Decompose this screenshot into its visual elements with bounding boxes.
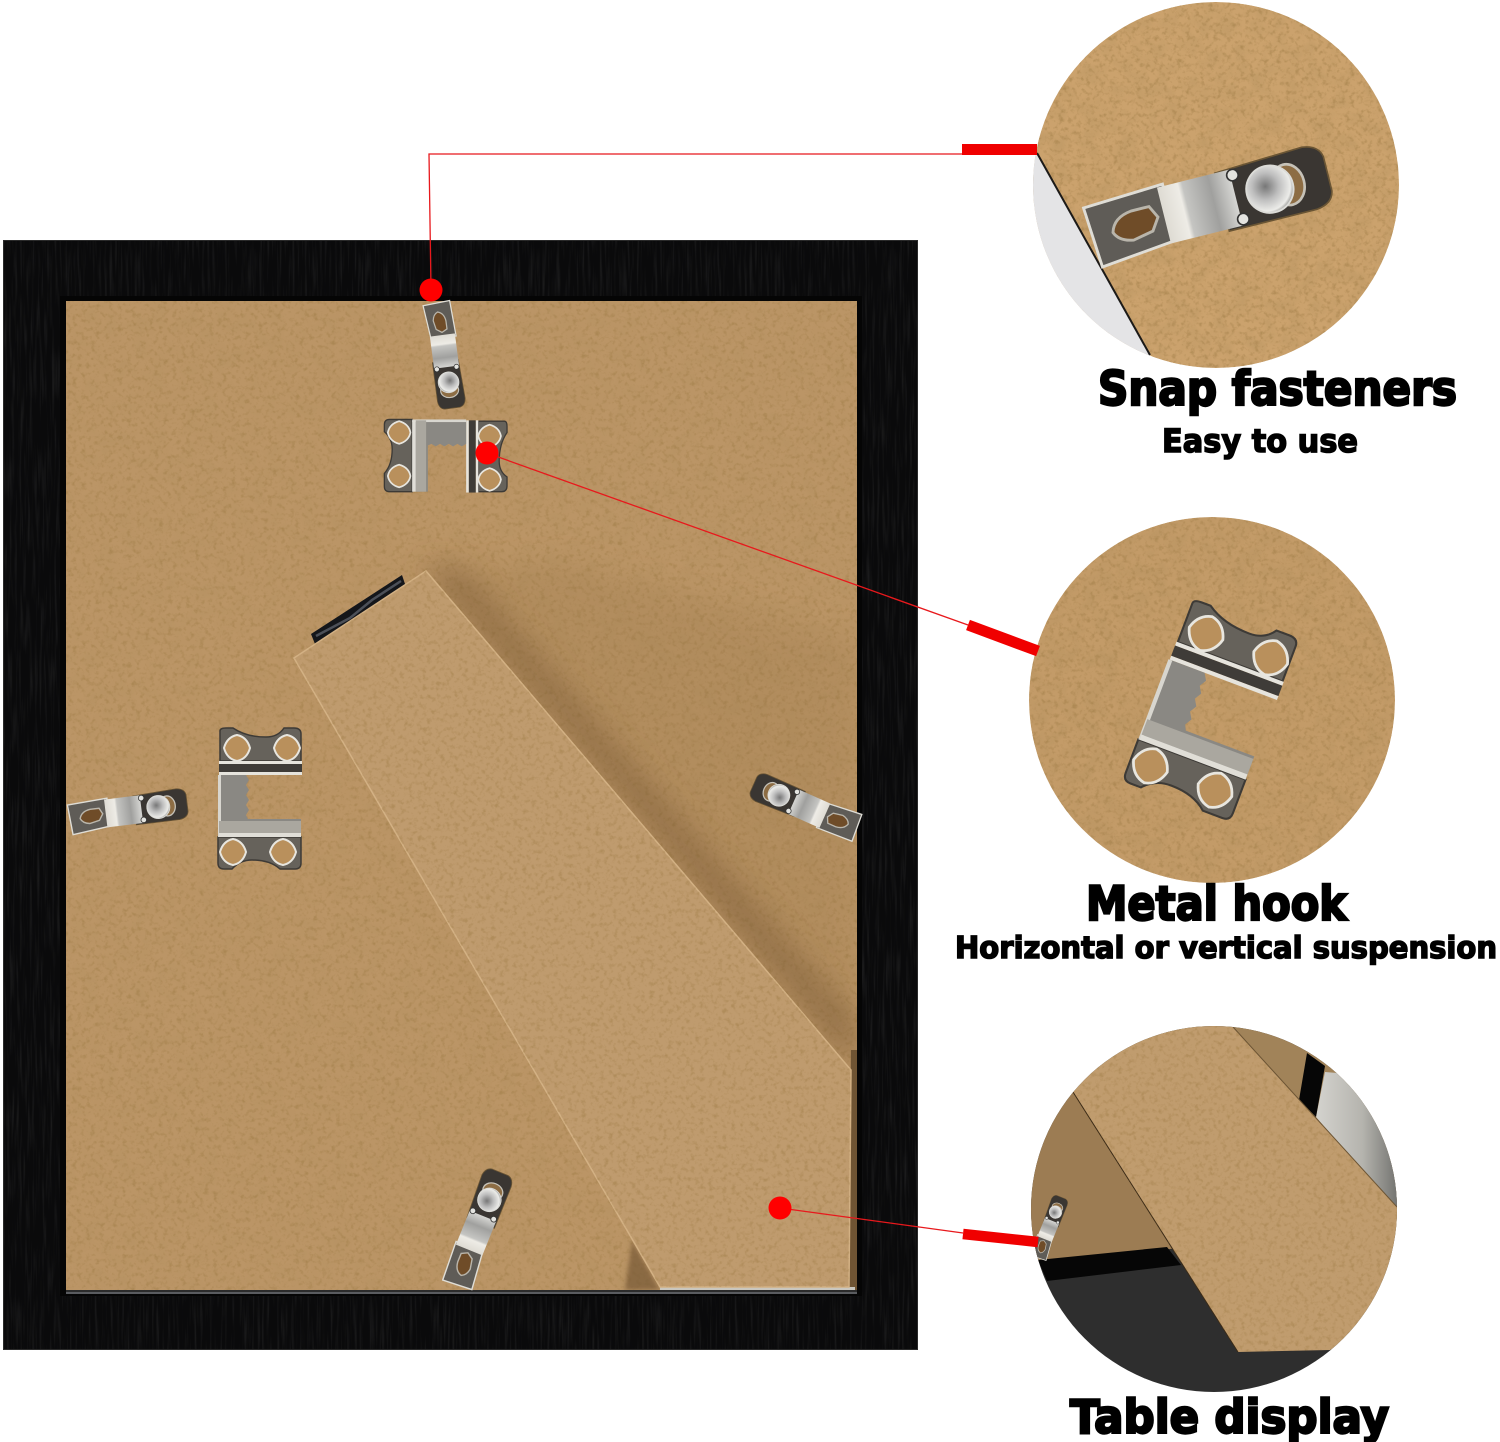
callout: metal hook leader <box>476 442 1038 651</box>
detail circle: snap fastener <box>1030 2 1399 372</box>
text: Easy to use: Easy to use <box>1162 422 1358 460</box>
detail circle: table display <box>1020 1020 1400 1392</box>
callout: snap fasteners leader <box>420 144 1037 302</box>
text: Horizontal or vertical suspension: Horizontal or vertical suspension <box>955 931 1497 966</box>
snap fastener: top <box>423 300 466 410</box>
heading: Snap fasteners: Snap fasteners <box>1098 362 1457 417</box>
heading: Metal hook: Metal hook <box>1086 877 1349 932</box>
callout: table display leader <box>768 1196 1038 1242</box>
metal hook: top <box>384 419 507 493</box>
easel stand <box>290 570 855 1290</box>
black frame <box>3 240 918 1350</box>
easel hinge <box>311 575 406 644</box>
detail circle: metal hook <box>1029 517 1395 883</box>
hardboard backing <box>66 301 860 1290</box>
snap fastener: right <box>748 769 864 844</box>
picture frame back <box>3 240 918 1350</box>
bottom edge highlight <box>66 1287 857 1294</box>
metal hook: left <box>218 728 302 869</box>
snap fastener: bottom <box>440 1166 517 1291</box>
snap fastener: left <box>67 788 189 835</box>
